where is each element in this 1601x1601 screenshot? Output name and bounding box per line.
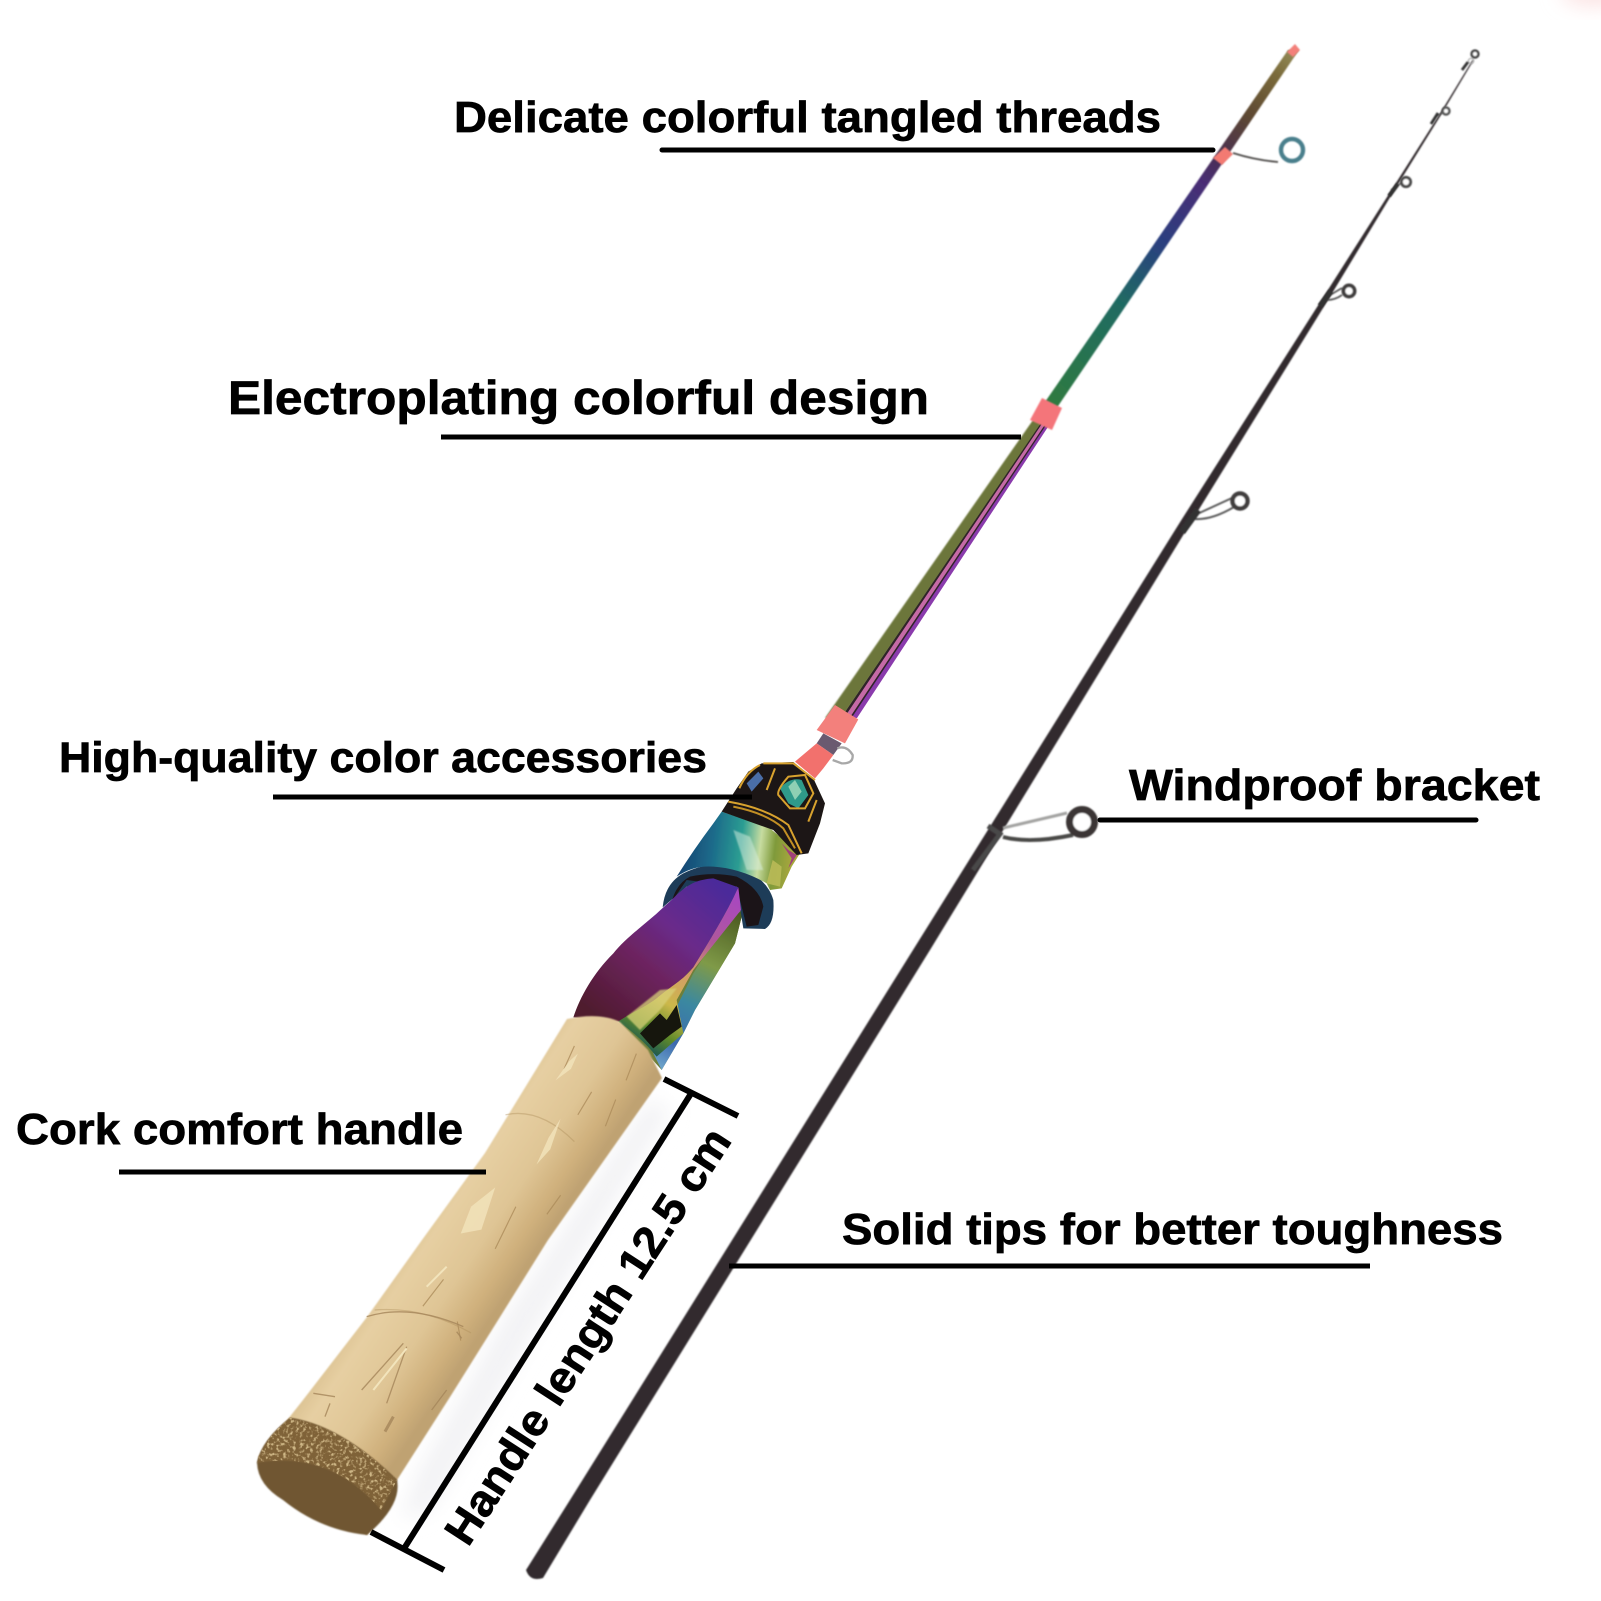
lower wrap — [795, 743, 833, 778]
tip guide — [1462, 51, 1478, 70]
label: cork handle: Cork comfort handle — [16, 1105, 463, 1154]
left rod: electroplated colourful blank — [825, 44, 1303, 718]
lower blank dark stripes and pink, purple bands — [841, 420, 1052, 718]
dimension: handle length — [371, 1079, 741, 1570]
blank stub — [817, 733, 842, 755]
handle shadow — [400, 1100, 670, 1520]
reel seat — [573, 762, 825, 1070]
cork handle — [257, 1016, 662, 1535]
label: electroplating: Electroplating colorful design — [228, 371, 929, 424]
thread wrap 2 — [1030, 398, 1062, 430]
side trigger panel — [653, 910, 743, 1070]
guide 5 — [1431, 108, 1449, 124]
gold lines on collar — [728, 763, 817, 853]
right rod: solid tip blank with guides — [526, 51, 1478, 1579]
black reflection — [640, 1005, 682, 1048]
label: windproof bracket: Windproof bracket — [1129, 761, 1540, 810]
guide 4 — [1389, 177, 1411, 196]
largest guide (windproof bracket) — [973, 810, 1094, 870]
hook keeper — [833, 747, 853, 763]
hood sleeve — [677, 812, 800, 890]
first guide — [1233, 139, 1303, 162]
cork marks upper — [375, 1046, 636, 1341]
iridescent lower body — [618, 887, 741, 1057]
blank — [526, 60, 1474, 1579]
purple handle body — [573, 878, 738, 1022]
lower wraps and keeper — [795, 705, 858, 778]
tip wrap — [1287, 44, 1300, 57]
upper blank — [1036, 50, 1299, 415]
hood rim — [663, 864, 774, 929]
thread wrap — [817, 705, 858, 743]
label: solid tips: Solid tips for better toughness — [842, 1205, 1503, 1254]
lower blank olive band — [825, 420, 1045, 718]
guide 3 — [1320, 285, 1355, 306]
label: accessories: High-quality color accessories — [59, 734, 707, 782]
collar window — [780, 779, 808, 808]
base fill — [618, 887, 743, 1070]
thread wrap 1 — [1213, 147, 1233, 165]
label: delicate threads: Delicate colorful tangled threads — [454, 93, 1161, 142]
collar — [722, 762, 825, 855]
cork body — [258, 1016, 662, 1535]
dimension: handle length: Handle length 12.5 cm — [435, 1119, 741, 1553]
guide 2 — [1182, 494, 1248, 532]
end cap — [257, 1418, 398, 1535]
corner smudge — [1561, 0, 1601, 6]
cork marks lower — [313, 1267, 463, 1432]
